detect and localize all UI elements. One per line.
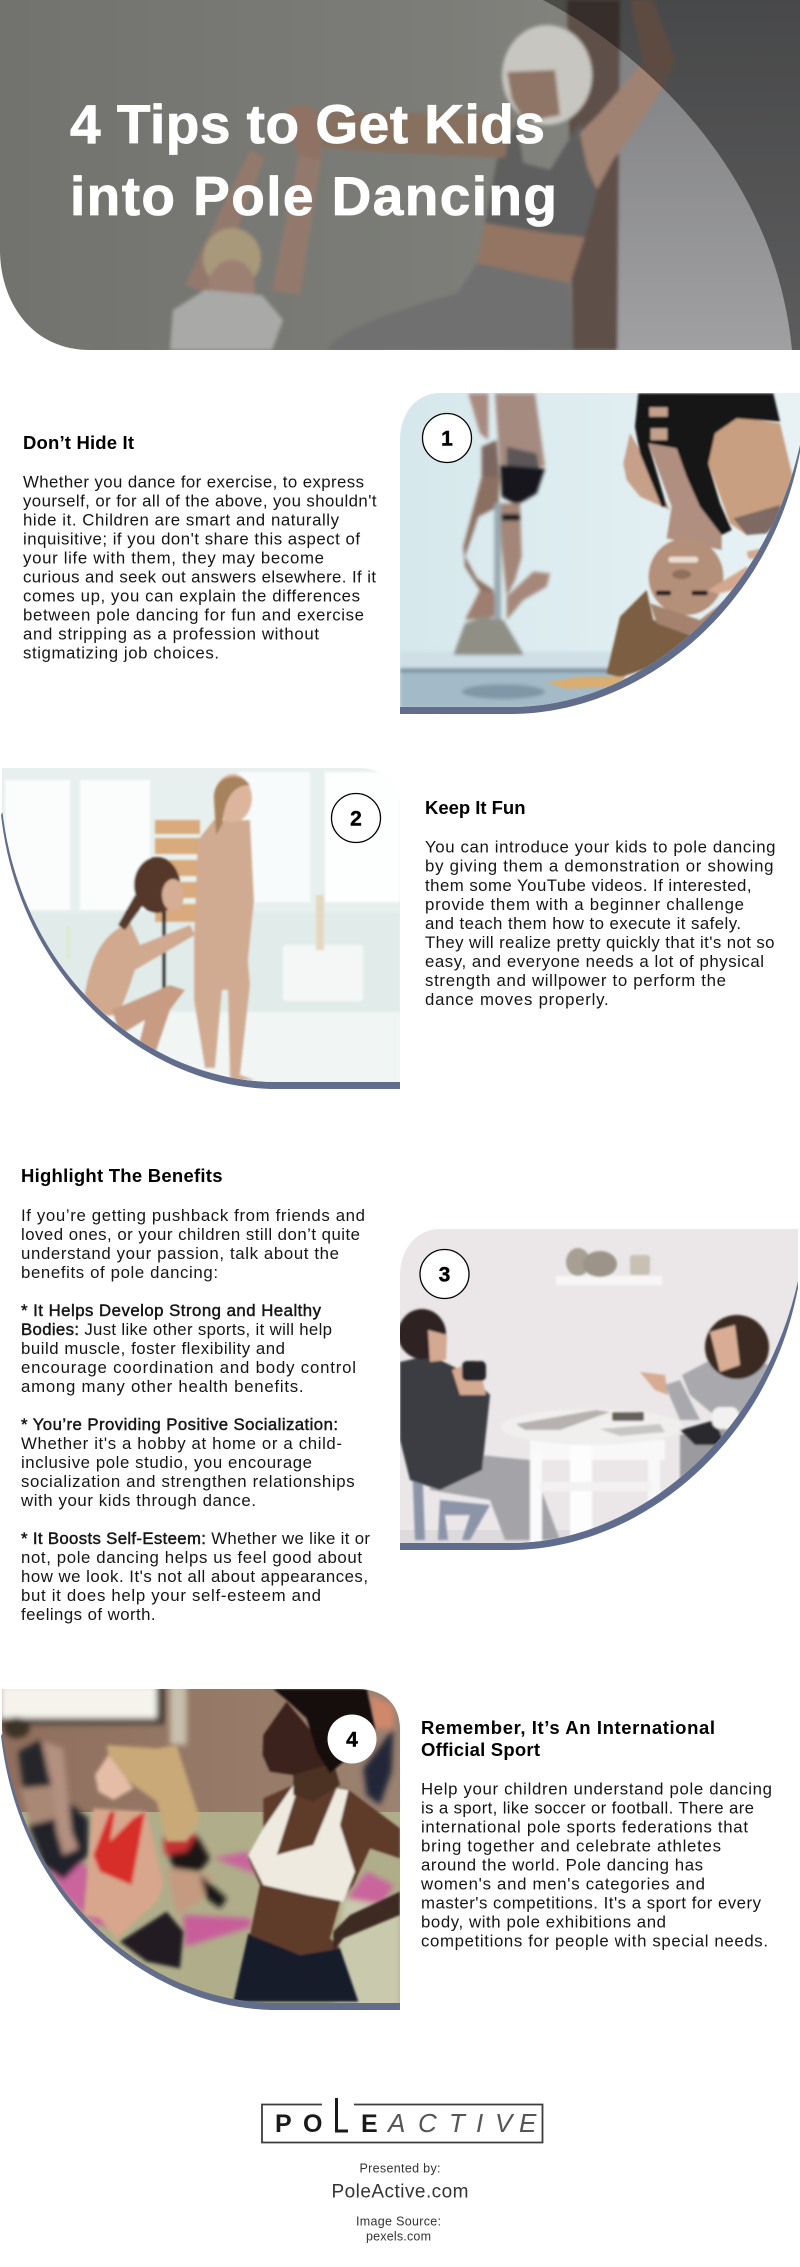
tip 1 paragraph: between pole dancing for fun and exercise (23, 606, 364, 625)
tip 1 paragraph: your life with them, they may become (23, 548, 324, 568)
tip 3 paragraph (20, 1206, 370, 1624)
PoleActive logo: ACTIVE (386, 2108, 537, 2138)
tip 1 paragraph (23, 472, 377, 663)
tip 4 heading: Remember, It’s An International (421, 1717, 715, 1738)
number badge 2 (332, 794, 380, 842)
tip 3 paragraph: how we look. It's not all about appearances, (21, 1567, 368, 1586)
tip 3 paragraph: among many other health benefits. (21, 1377, 304, 1396)
tip 4 paragraph: Help your children understand pole dancing (421, 1779, 772, 1798)
tip 1 paragraph: stigmatizing job choices. (23, 644, 219, 663)
tip 2 paragraph: provide them with a beginner challenge (425, 895, 744, 914)
image accent band (1, 1726, 400, 2010)
header banner photo (0, 0, 800, 350)
footer credits (332, 2162, 468, 2244)
photo: two women talking at a table (398, 1229, 800, 1550)
tip 4 image (0, 1685, 400, 2015)
tip 4 paragraph: around the world. Pole dancing has (421, 1856, 703, 1874)
tip 4 heading (421, 1717, 715, 1760)
tip 1 paragraph: comes up, you can explain the differences (23, 587, 360, 606)
tip 1 paragraph: curious and seek out answers elsewhere. If it (23, 568, 376, 586)
tip 2 paragraph: them some YouTube videos. If interested, (425, 876, 752, 895)
tip 3 paragraph: feelings of worth. (21, 1605, 156, 1624)
tip 3 paragraph: build muscle, foster flexibility and (21, 1339, 285, 1358)
tip 1 paragraph: yourself, or for all of the above, you shouldn't (23, 491, 377, 510)
tip 3 paragraph: understand your passion, talk about the (21, 1244, 339, 1263)
number badge 3 (420, 1250, 469, 1298)
tip 4 heading: Official Sport (421, 1739, 540, 1760)
number badge 1 (422, 414, 472, 462)
title: 4 Tips to Get Kids (70, 93, 545, 155)
tip 2 text block (425, 797, 776, 1009)
tip 2 paragraph: easy, and everyone needs a lot of physical (425, 952, 764, 971)
title: into Pole Dancing (70, 165, 557, 227)
tip 3 paragraph: socialization and strengthen relationships (21, 1472, 355, 1491)
tip 1 paragraph: inquisitive; if you don't share this aspect of (23, 529, 360, 548)
image accent band (1, 805, 400, 1089)
tip 2 paragraph: dance moves properly. (425, 990, 609, 1009)
tip 3 paragraph: with your kids through dance. (20, 1491, 256, 1510)
tip 1 paragraph: and stripping as a profession without (23, 625, 319, 644)
tip 3 paragraph: encourage coordination and body control (21, 1358, 356, 1377)
number badge 4: 4 (346, 1728, 358, 1752)
footer credits: Presented by: (360, 2162, 440, 2176)
tip 2 paragraph (425, 838, 776, 1009)
PoleActive logo (262, 2098, 542, 2142)
tip 1 heading: Don’t Hide It (23, 432, 134, 453)
tip 3 paragraph: Bodies: Just like other sports, it will help (21, 1320, 332, 1339)
photo: women in a fitness class (0, 1685, 400, 2015)
tip 2 heading: Keep It Fun (425, 797, 526, 818)
tip 2 paragraph: and teach them how to execute it safely. (425, 914, 741, 933)
tip 4 paragraph: master's competitions. It's a sport for every (421, 1894, 762, 1913)
tip 3 paragraph: * It Boosts Self-Esteem: Whether we like it or (21, 1529, 370, 1548)
tip 3 paragraph: loved ones, or your children still don’t quite (21, 1225, 360, 1244)
tip 3 text block (20, 1165, 370, 1624)
tip 4 paragraph (420, 1779, 772, 1951)
tip 4 paragraph: body, with pole exhibitions and (421, 1913, 666, 1932)
number badge 3: 3 (439, 1264, 450, 1286)
PoleActive logo: POE (275, 2110, 378, 2138)
tip 2 image (0, 768, 400, 1089)
footer credits: PoleActive.com (332, 2182, 468, 2203)
tip 3 paragraph: benefits of pole dancing: (21, 1263, 218, 1282)
tip 1 text block (23, 432, 377, 663)
tip 2 paragraph: You can introduce your kids to pole dancing (425, 838, 776, 857)
tip 4 paragraph: is a sport, like soccer or football. There are (421, 1798, 754, 1817)
image accent band (400, 438, 800, 714)
photo: pole dancer upside down (400, 393, 800, 714)
number badge 1: 1 (441, 428, 453, 450)
tip 4 text block (420, 1717, 772, 1951)
tip 1 image (400, 393, 800, 714)
tip 3 paragraph: Whether it's a hobby at home or a child- (21, 1434, 342, 1453)
tip 4 paragraph: bring together and celebrate athletes (421, 1836, 721, 1855)
number badge 2: 2 (350, 808, 362, 830)
tip 4 paragraph: women's and men's categories and (420, 1874, 705, 1894)
title (70, 93, 557, 227)
tip 4 paragraph: international pole sports federations that (421, 1817, 748, 1836)
footer credits: pexels.com (366, 2230, 431, 2244)
photo: woman guiding child (0, 768, 400, 1089)
tip 3 heading: Highlight The Benefits (21, 1165, 222, 1186)
image accent band (400, 1274, 798, 1550)
tip 3 paragraph: If you’re getting pushback from friends and (21, 1206, 365, 1225)
tip 1 paragraph: hide it. Children are smart and naturally (23, 510, 340, 529)
tip 3 paragraph: * It Helps Develop Strong and Healthy (21, 1301, 322, 1320)
tip 3 image (398, 1229, 800, 1550)
tip 1 paragraph: Whether you dance for exercise, to express (23, 472, 364, 491)
footer credits: Image Source: (356, 2215, 441, 2229)
tip 4 paragraph: competitions for people with special needs. (421, 1932, 768, 1951)
tip 3 paragraph: inclusive pole studio, you encourage (21, 1453, 312, 1472)
number badge 4 (328, 1714, 376, 1764)
tip 2 paragraph: They will realize pretty quickly that it's not so (425, 933, 774, 952)
tip 3 paragraph: * You’re Providing Positive Socialization: (21, 1415, 338, 1434)
tip 2 paragraph: by giving them a demonstration or showing (425, 857, 774, 876)
tip 2 paragraph: strength and willpower to perform the (425, 971, 726, 990)
tip 3 paragraph: not, pole dancing helps us feel good about (21, 1548, 362, 1567)
tip 3 paragraph: but it does help your self-esteem and (21, 1586, 321, 1605)
